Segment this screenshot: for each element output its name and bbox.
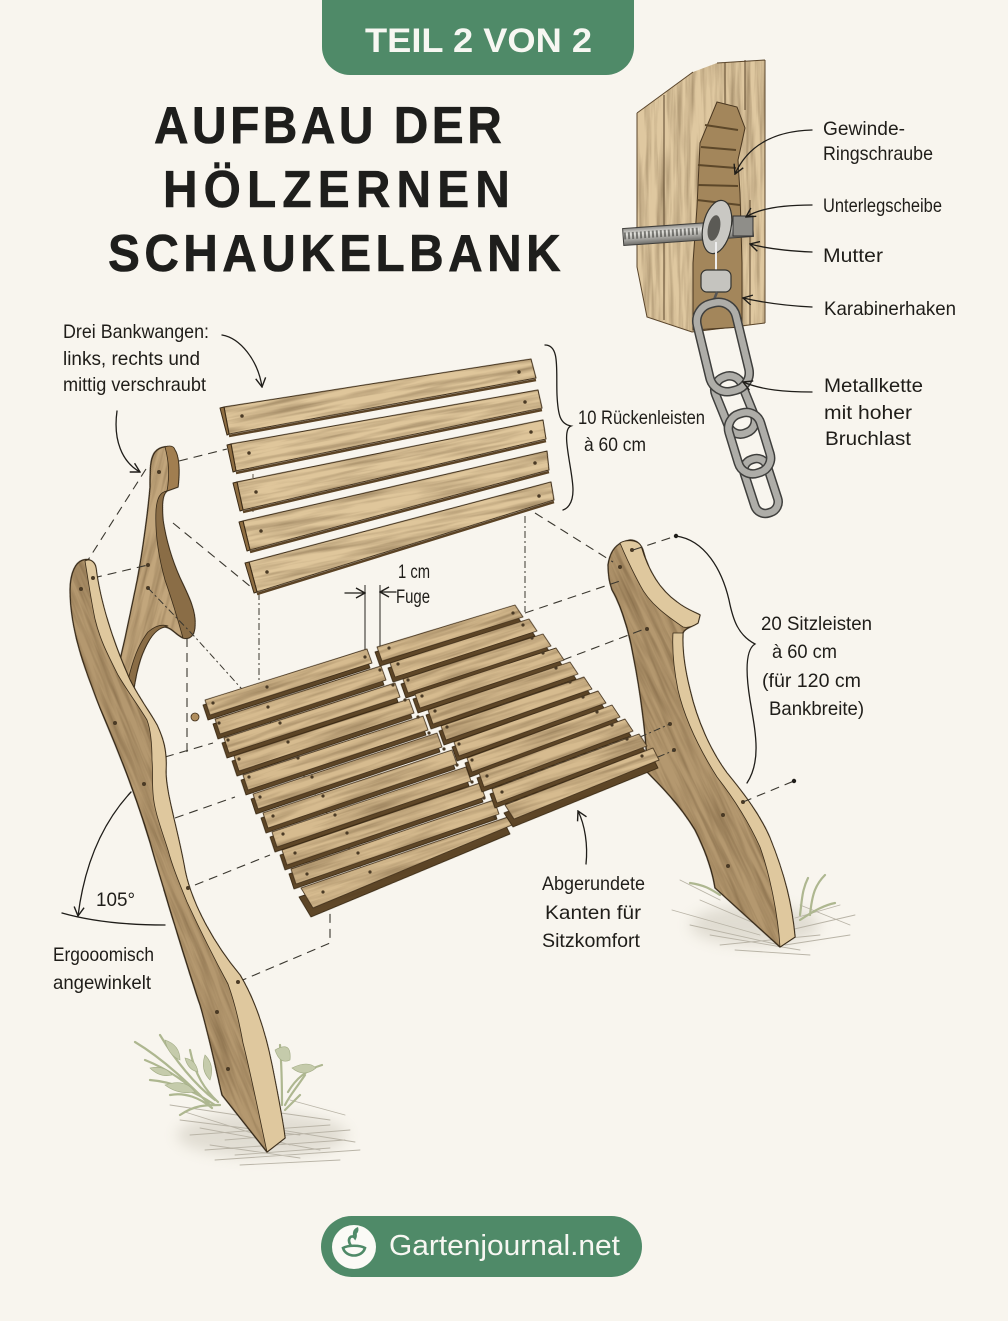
- arrow: Metallkette: [743, 382, 812, 392]
- title: AUFBAU DER: [154, 96, 502, 154]
- washer: [698, 198, 736, 256]
- detail callouts with arrows: [735, 118, 956, 450]
- screw eye wire: [715, 242, 717, 271]
- annotation: Drei Bankwangen: [63, 321, 262, 472]
- label text: à 60 cm: [772, 641, 837, 663]
- threaded bolt: [623, 219, 753, 246]
- arrow: [578, 811, 587, 864]
- annotation: 10 Rückenleisten: [545, 345, 705, 510]
- label text: (für 120 cm: [762, 670, 861, 692]
- label: Karabinerhaken: Karabinerhaken: [824, 298, 956, 320]
- label: Gewinde-Ringschraube: Ringschraube: [823, 143, 933, 165]
- label text: [53, 944, 154, 994]
- annotation: 20 Sitzleisten: [674, 534, 872, 783]
- arrow: Mutter: [750, 244, 812, 252]
- arrow to backrest: [222, 335, 262, 387]
- label text: 1 cm: [398, 561, 430, 583]
- icon: sprout in bowl: [332, 1225, 376, 1269]
- arrow: Unterlegscheibe: [746, 205, 812, 217]
- bench side: left front cheek: [0, 485, 491, 1227]
- annotation: 1 cm Fuge: [345, 561, 430, 608]
- ground and grass under left leg: [135, 1035, 360, 1165]
- seat: right half of slats: [310, 522, 724, 910]
- label text: angewinkelt: [53, 972, 152, 994]
- back slats wood faces: [180, 297, 598, 654]
- curly brace with end dot: [676, 536, 756, 783]
- label: Mutter: Mutter: [823, 245, 884, 267]
- label text: Fuge: [396, 586, 430, 608]
- header badge: Teil 2 von 2: [322, 0, 634, 75]
- label text: Sitzkomfort: [542, 930, 641, 952]
- label: Gewinde-Ringschraube: [823, 118, 933, 165]
- back slat screw holes: [242, 372, 539, 572]
- nut: [733, 216, 753, 236]
- label text: [578, 407, 705, 456]
- label text: Drei Bankwangen:: [63, 321, 209, 343]
- label text: [542, 873, 645, 952]
- arrow: Karabinerhaken: [743, 298, 812, 307]
- bench side: right cheek: [452, 468, 951, 1019]
- ground and grass under right leg: [672, 875, 855, 955]
- label text: mittig verschraubt: [63, 374, 207, 396]
- title: SCHAUKELBANK: [108, 224, 561, 282]
- label text: Kanten für: [545, 902, 642, 924]
- label text: 10 Rückenleisten: [578, 407, 705, 429]
- label text: 20 Sitzleisten: [761, 613, 872, 635]
- header badge: Teil 2 von 2: TEIL 2 VON 2: [365, 22, 592, 60]
- label text: [63, 321, 209, 396]
- label: Metallkette mit hoher Bruchlast: Metallkette: [824, 375, 923, 397]
- back slats end grain and undersides: [220, 380, 554, 594]
- angle base line: [62, 913, 165, 925]
- label text: Bankbreite): [769, 698, 864, 720]
- label: Metallkette mit hoher Bruchlast: [824, 375, 923, 450]
- curly brace: [545, 345, 573, 510]
- angle arc with arrow: [78, 792, 131, 916]
- backrest: five slats: [180, 297, 598, 654]
- barrel connector: [701, 270, 731, 292]
- cavity in post: [693, 102, 745, 330]
- footer pill: Gartenjournal.net: [321, 1216, 642, 1277]
- exploded-view dashed assembly lines: [88, 365, 794, 982]
- bench side: rear (middle) cheek: [58, 428, 257, 713]
- arrows: [345, 592, 365, 594]
- label text: Ergooomisch: [53, 944, 154, 966]
- label: Metallkette mit hoher Bruchlast: mit hoher: [824, 402, 913, 424]
- chain links: [711, 372, 781, 516]
- annotation: Abgerundete Kanten: [542, 811, 645, 952]
- footer pill: Gartenjournal.net: Gartenjournal.net: [389, 1230, 620, 1262]
- label text: links, rechts und: [63, 348, 200, 370]
- label: Gewinde-Ringschraube: Gewinde-: [823, 118, 905, 140]
- label text: à 60 cm: [584, 434, 646, 456]
- wood post: [637, 60, 765, 332]
- title: [108, 96, 561, 282]
- label text: [396, 561, 430, 608]
- angle value: 105°: [96, 889, 135, 911]
- seat screw holes: [213, 613, 642, 892]
- label text: Abgerundete: [542, 873, 645, 895]
- detail illustration: wood post with ring screw and chain: [623, 60, 781, 516]
- label text: [761, 613, 872, 720]
- label: Metallkette mit hoher Bruchlast: Bruchlast: [825, 428, 912, 450]
- title: HÖLZERNEN: [163, 160, 510, 218]
- annotation: 105 degree angle: [53, 792, 165, 994]
- peg at seat corner: [191, 713, 199, 721]
- arrow: Gewinde-Ringschraube: [735, 130, 812, 174]
- label: Unterlegscheibe: Unterlegscheibe: [823, 195, 942, 217]
- seat: left half of slats: [124, 558, 591, 1008]
- arrow to rear cheek: [116, 411, 140, 472]
- carabiner: [693, 299, 753, 395]
